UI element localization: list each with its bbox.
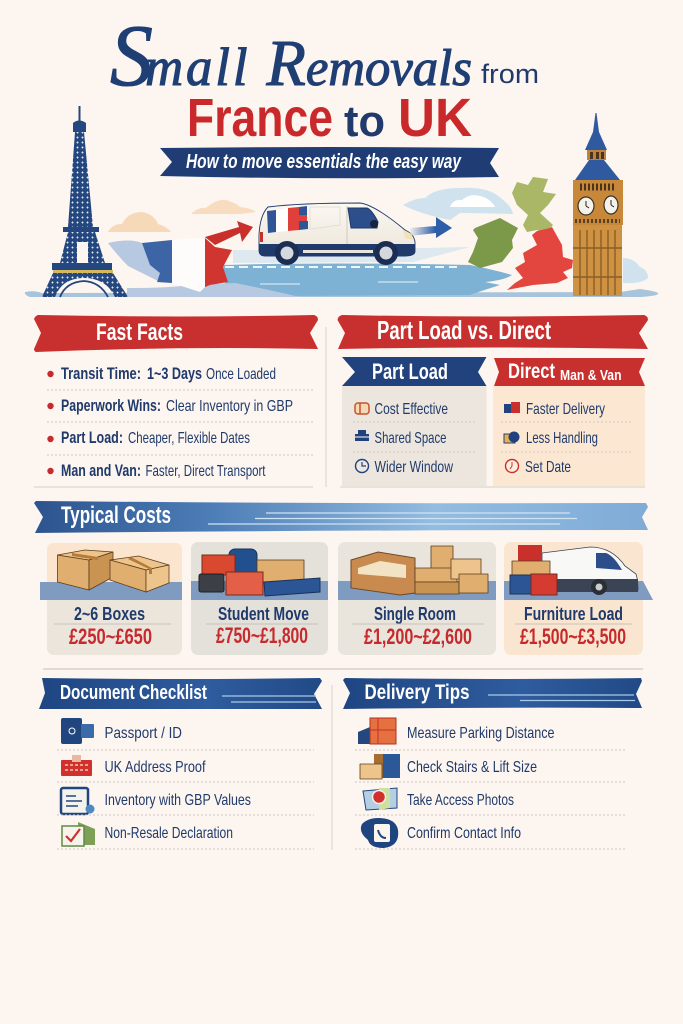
title word: France: France bbox=[187, 88, 333, 148]
fact: man and van: Faster, Direct Transport bbox=[146, 463, 266, 480]
panel: document checklist bbox=[39, 678, 322, 849]
card: 2-6 boxes: £250~£650 bbox=[69, 624, 152, 649]
card: single room: £1,200~£2,600 bbox=[364, 624, 472, 649]
heading: delivery tips: Delivery Tips bbox=[364, 681, 470, 704]
item: address proof bbox=[61, 755, 206, 776]
item: non-resale: Non-Resale Declaration bbox=[104, 825, 233, 842]
icon: faster delivery bbox=[504, 402, 520, 413]
item: parking: Measure Parking Distance bbox=[407, 725, 555, 742]
panel: fast facts bbox=[34, 315, 318, 487]
column: direct: Set Date bbox=[525, 459, 571, 476]
illustration: student boxes and bags bbox=[199, 549, 320, 596]
item: contact bbox=[361, 818, 521, 848]
icon: clipboard bbox=[61, 788, 94, 814]
clouds bbox=[108, 188, 648, 283]
card: student move: £750~£1,800 bbox=[216, 623, 308, 648]
icon: shared space bbox=[355, 430, 369, 441]
heading: delivery tips bbox=[343, 678, 642, 709]
heading: fast facts bbox=[34, 315, 318, 352]
item: stairs bbox=[360, 754, 537, 779]
item: photos: Take Access Photos bbox=[407, 792, 514, 809]
card: single room: Single Room bbox=[374, 604, 456, 624]
item: stairs: Check Stairs & Lift Size bbox=[407, 759, 537, 776]
Eiffel Tower bbox=[42, 106, 128, 297]
flag on van bbox=[267, 206, 308, 233]
dashed road line bbox=[225, 266, 457, 268]
item: inventory bbox=[61, 788, 251, 814]
panel: delivery tips bbox=[343, 678, 642, 849]
column: direct: Direct bbox=[508, 360, 555, 383]
icon: less handling bbox=[504, 432, 520, 443]
card: furniture load bbox=[504, 542, 653, 655]
fact: part load: Cheaper, Flexible Dates bbox=[128, 430, 250, 447]
heading: part load vs direct bbox=[338, 315, 648, 349]
arrow: blue bbox=[410, 217, 452, 238]
icon: map pin bbox=[363, 788, 397, 810]
fact: paperwork bbox=[47, 396, 293, 415]
van bbox=[259, 203, 415, 265]
fact: transit time: Once Loaded bbox=[206, 366, 276, 383]
heading: part load vs direct: Part Load vs. Direct bbox=[377, 315, 551, 345]
arrow: red bbox=[205, 221, 253, 245]
item: passport: Passport / ID bbox=[104, 725, 182, 742]
column: direct: Man & Van bbox=[560, 367, 622, 384]
item: address proof: UK Address Proof bbox=[104, 759, 206, 776]
panel: part load vs direct bbox=[338, 315, 648, 487]
subtitle ribbon: How to move essentials the easy way bbox=[186, 151, 462, 173]
fact: part load bbox=[47, 428, 250, 447]
map: Ireland bbox=[468, 218, 518, 268]
France map bbox=[142, 238, 232, 292]
fact: transit time bbox=[47, 364, 276, 383]
fact: transit time: 1~3 Days bbox=[147, 364, 202, 383]
illustration: two boxes bbox=[58, 550, 169, 592]
item: passport bbox=[61, 718, 182, 744]
item: non-resale bbox=[62, 822, 233, 846]
icon: check bbox=[62, 822, 95, 846]
card: furniture load: Furniture Load bbox=[524, 604, 623, 624]
icon: cost effective bbox=[355, 403, 369, 414]
column: part load: Wider Window bbox=[374, 459, 453, 476]
card: 2-6 boxes bbox=[40, 543, 182, 655]
heading: fast facts: Fast Facts bbox=[96, 319, 183, 346]
heading: document checklist bbox=[39, 678, 322, 709]
item: photos bbox=[363, 788, 514, 810]
icon: boxes bbox=[358, 718, 396, 744]
map: England bbox=[507, 227, 573, 290]
icon: passport bbox=[61, 718, 94, 744]
card: student move: Student Move bbox=[218, 604, 309, 624]
icon: set date bbox=[506, 460, 518, 472]
icon: stacked boxes bbox=[360, 754, 400, 779]
title word: UK: UK bbox=[398, 88, 472, 148]
illustration: bed and boxes bbox=[351, 546, 488, 595]
fact: man and van bbox=[47, 461, 266, 480]
heading: typical costs bbox=[34, 501, 648, 533]
heading: typical costs: Typical Costs bbox=[61, 502, 171, 529]
column: part load: Cost Effective bbox=[374, 401, 448, 418]
word: from: from bbox=[481, 59, 539, 89]
card: 2-6 boxes: 2~6 Boxes bbox=[74, 604, 145, 624]
icon: wider window bbox=[356, 460, 368, 472]
panel: typical costs bbox=[34, 501, 653, 655]
title bbox=[110, 8, 539, 148]
map: Scotland bbox=[512, 177, 556, 232]
title word: to: to bbox=[344, 97, 385, 146]
fact: transit time: Transit Time: bbox=[61, 364, 141, 383]
hero illustration bbox=[25, 106, 658, 297]
fact: paperwork: Clear Inventory in GBP bbox=[166, 398, 293, 415]
card: furniture load: £1,500~£3,500 bbox=[520, 624, 626, 649]
item: contact: Confirm Contact Info bbox=[407, 825, 521, 842]
illustration: van with boxes bbox=[510, 545, 638, 595]
column: direct bbox=[493, 358, 645, 486]
item: parking bbox=[358, 718, 555, 744]
heading: document checklist: Document Checklist bbox=[60, 682, 207, 704]
fact: part load: Part Load: bbox=[61, 428, 123, 447]
Big Ben bbox=[573, 113, 623, 296]
ground and water bbox=[25, 240, 658, 297]
icon: address bbox=[61, 755, 92, 776]
column: direct: Faster Delivery bbox=[526, 401, 605, 418]
column: part load bbox=[342, 357, 486, 486]
card: single room bbox=[338, 542, 496, 655]
subtitle ribbon bbox=[160, 147, 499, 178]
title line one: script: Small Removals bbox=[110, 8, 472, 105]
column: direct: Less Handling bbox=[526, 430, 598, 447]
column: part load: Shared Space bbox=[374, 430, 447, 447]
fact: man and van: Man and Van: bbox=[61, 461, 141, 480]
fact: paperwork: Paperwork Wins: bbox=[61, 396, 161, 415]
icon: contact bbox=[361, 818, 398, 848]
item: inventory: Inventory with GBP Values bbox=[104, 792, 251, 809]
column: part load: Part Load bbox=[372, 359, 448, 384]
card: student move bbox=[191, 542, 328, 655]
